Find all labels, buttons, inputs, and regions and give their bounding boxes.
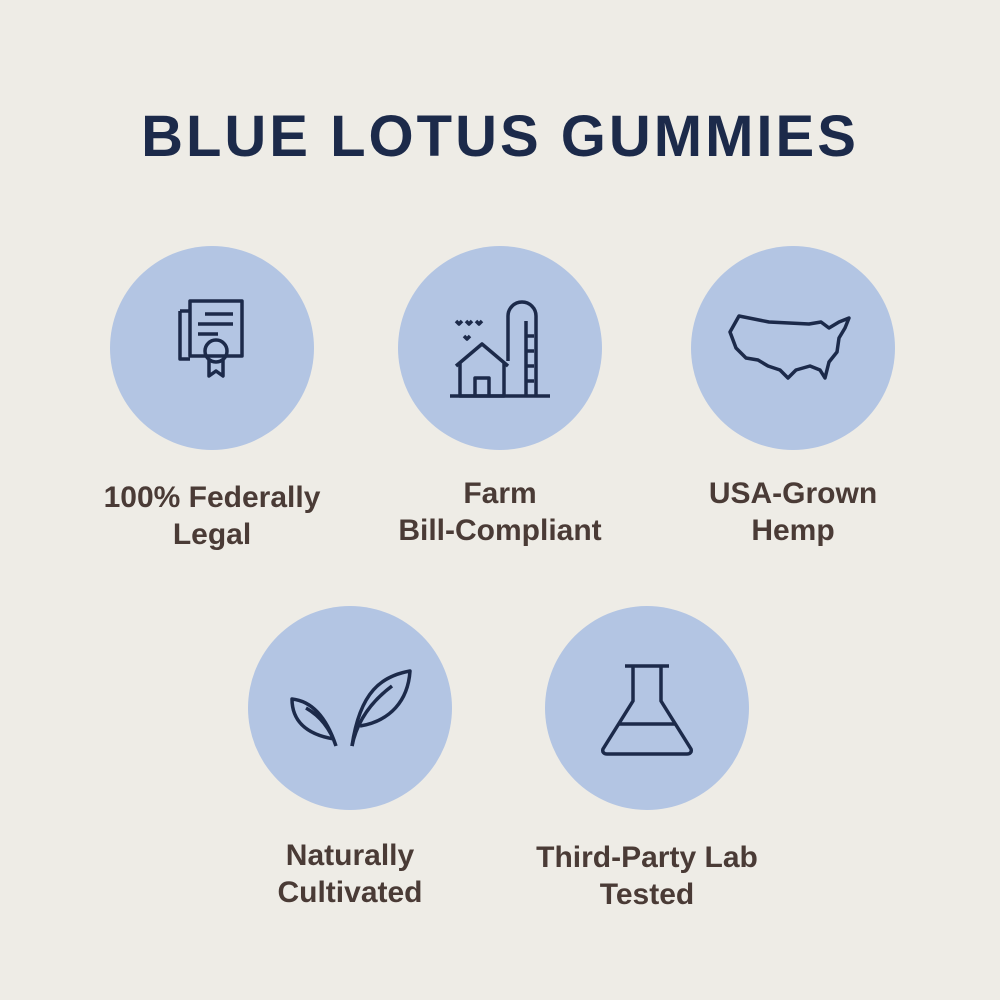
label: Tested xyxy=(600,878,694,911)
label: Naturally xyxy=(286,839,414,872)
item: farm bill xyxy=(398,246,602,547)
label xyxy=(104,481,320,551)
label xyxy=(398,477,602,547)
label xyxy=(709,477,877,547)
item: usa grown xyxy=(691,246,895,547)
item: naturally cultivated xyxy=(248,606,452,909)
label: Legal xyxy=(173,518,251,551)
title: BLUE LOTUS GUMMIES xyxy=(141,104,859,169)
label: Hemp xyxy=(751,514,835,547)
label: Cultivated xyxy=(277,876,423,909)
label xyxy=(277,839,423,909)
icon: certificate xyxy=(110,246,314,450)
label: Farm xyxy=(463,477,537,510)
icon: farm xyxy=(398,246,602,450)
label xyxy=(536,841,758,911)
icon: leaves xyxy=(248,606,452,810)
icon: flask xyxy=(545,606,749,810)
label: Bill-Compliant xyxy=(398,514,602,547)
item: lab tested xyxy=(536,606,758,911)
icon: usa map xyxy=(691,246,895,450)
item: federally legal xyxy=(104,246,320,551)
label: 100% Federally xyxy=(104,481,320,514)
label: Third-Party Lab xyxy=(536,841,758,874)
label: USA-Grown xyxy=(709,477,877,510)
